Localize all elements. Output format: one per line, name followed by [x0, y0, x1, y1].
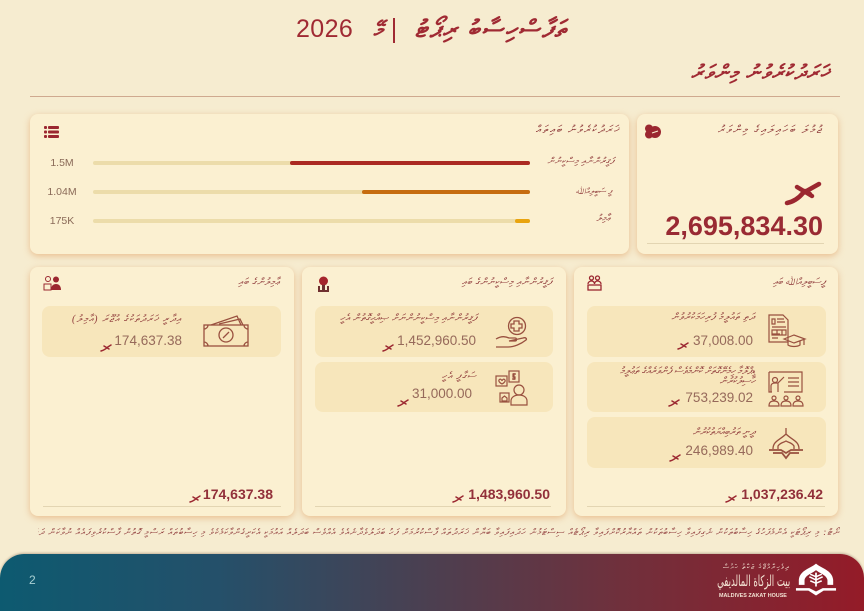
item: administration: 174,637.38: [114, 333, 182, 348]
logo text: ދިވެހިރާއްޖޭގެ ޒަކާތު ހައުސް: [723, 563, 790, 571]
bar row: amil 175K: ޢާމިލު: [596, 214, 610, 224]
bar row: fi sabilillah 1.04M: ފީ ސަބީލިއްﷲ: [575, 186, 612, 196]
item: medical assistance: [315, 306, 553, 357]
item: training: [587, 362, 826, 412]
title: ތަފާސްހިސާބު ރިޕޯޓު: [415, 17, 568, 43]
card heading: ފީސަބީލިއްﷲ ބައި: [773, 277, 825, 288]
bar row: amil 175K: 175K: [50, 215, 74, 227]
total heading: ޖުމުލަ ބަހައިލައިގެ މިންވަރު: [718, 124, 823, 136]
item: religious: ދީނީ ތަރުބިއްޔަތުކުރުން: [693, 427, 755, 438]
item: social assistance: [315, 362, 553, 412]
logo text: بيت الزكاة المالديفي: [717, 572, 790, 590]
chart heading: ޚަރަދުކުރެވުނު ބައިތައް: [536, 124, 620, 136]
icon: hand with medical cross: [496, 316, 528, 348]
footer bar: [0, 554, 864, 611]
icon: people: [587, 275, 602, 291]
bar row: poor and needy 1.5M: ފަޤީރުންނާއި މިސްކީނުން: [547, 157, 614, 167]
logo icon: mosque and book: [796, 564, 836, 596]
icon: document with graduation cap: [768, 314, 806, 348]
icon: mosque on book: [769, 428, 803, 460]
bar row: fi sabilillah 1.04M: [47, 186, 613, 198]
bar row: amil 175K: [50, 212, 612, 227]
item: education: [587, 306, 826, 357]
panel: fi sabilillah: [574, 267, 838, 516]
item: education: ދަތި ތައުލީމު ފުރިހަމަކުރުވުން: [671, 312, 755, 323]
item: administration: [42, 306, 281, 357]
icon: banknotes: [203, 315, 249, 347]
icon: coins: [645, 124, 661, 138]
icon: rufiyaa sign large: [784, 182, 822, 206]
title: މޭ: [373, 17, 383, 42]
item: religious: [587, 417, 826, 468]
icon: teacher and students: [768, 371, 804, 407]
bar row: poor and needy 1.5M: [50, 156, 616, 169]
bar row: poor and needy 1.5M: 1.5M: [50, 157, 74, 169]
item: training: 753,239.02: [685, 390, 753, 405]
logo text: [717, 563, 790, 599]
panel: chart of spending by category: [30, 114, 629, 254]
card heading: ޢާމިލުންގެ ބައި: [238, 277, 280, 288]
total amount value: 2,695,834.30: [665, 211, 823, 241]
section heading: ޚަރަދުކުރެވުނު މިންވަރު: [691, 62, 830, 84]
card total: 1,483,960.50: [468, 486, 550, 502]
card heading: ފަޤީރުންނާއި މިސްކީނުންގެ ބައި: [462, 277, 552, 288]
icon: list: [44, 126, 59, 138]
card total: 1,037,236.42: [741, 486, 823, 502]
item: medical assistance: ފަޤީރުންނާއި މިސްކީނުންނަށް ޞިއްޙީގޮތުން އެހީ: [340, 313, 477, 324]
logo text: MALDIVES ZAKAT HOUSE: [719, 593, 787, 599]
panel: amil: [30, 267, 294, 516]
item: social assistance: ސަގާފީ އެހީ: [442, 371, 477, 382]
item: religious: 246,989.40: [685, 443, 753, 458]
item: social assistance: 31,000.00: [412, 386, 472, 401]
bar row: fi sabilillah 1.04M: 1.04M: [47, 186, 77, 198]
page number: 2: [29, 573, 36, 587]
panel: poor and needy: [302, 267, 566, 516]
panel: total amount: [637, 114, 838, 254]
item: education: 37,008.00: [693, 333, 753, 348]
item: medical assistance: 1,452,960.50: [397, 333, 476, 348]
title: [296, 15, 569, 43]
icon: person with aid symbols: [495, 370, 528, 406]
icon: staff: [44, 276, 61, 290]
card total: 174,637.38: [203, 486, 273, 502]
item: administration: އިދާރީ ޚަރަދުތަކުގެ އުޖޫރަ (އާމިލު): [72, 314, 182, 325]
title: 2026: [296, 15, 353, 43]
icon: person with heart: [318, 276, 329, 292]
item: training: ޑިޕްލޮމާ ހިމެނޭގޮތަށް ކޮންމެވެސް ފެންވަރެއްގެ ތަޢުލީމު ހާސިލުކުރުން: [620, 366, 755, 387]
